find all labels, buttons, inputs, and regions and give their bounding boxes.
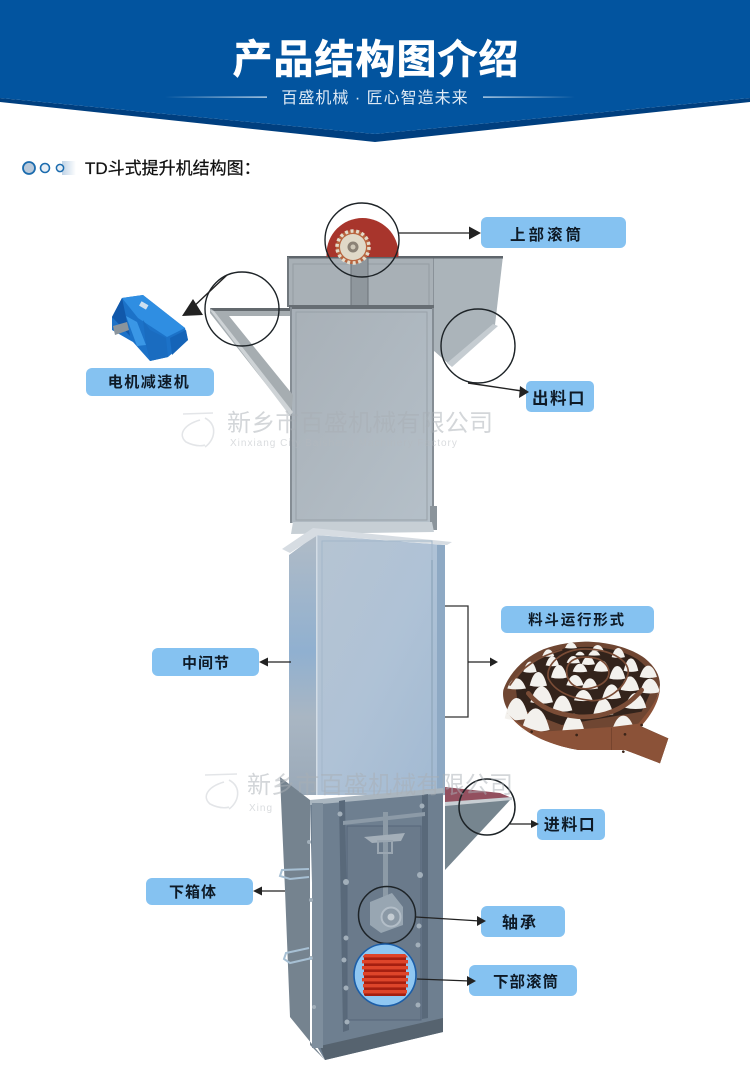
label: motor reducer: 电机减速机	[108, 374, 190, 391]
label: lower box: 下箱体	[169, 883, 217, 901]
label: bearing: 轴承	[502, 914, 538, 932]
watermark text: 新乡市百盛机械有限公司	[227, 410, 493, 437]
bracket arrow: bucket form	[445, 606, 498, 717]
header banner	[0, 0, 750, 142]
label: lower drum	[469, 965, 577, 996]
handles	[280, 869, 309, 879]
head box	[287, 257, 433, 307]
bolts	[307, 804, 424, 1024]
label: lower drum: 下部滚筒	[493, 972, 559, 991]
label: inlet: 进料口	[544, 816, 596, 834]
machine: middle section	[282, 528, 452, 795]
label: discharge	[526, 381, 594, 412]
title: 产品结构图介绍	[232, 38, 520, 82]
photo: bucket belt spiral	[503, 642, 668, 763]
label: motor reducer	[86, 368, 214, 396]
discharge hopper	[433, 256, 503, 365]
gate rod	[383, 812, 388, 907]
watermark logo	[182, 413, 214, 447]
icon: gear reducer	[112, 295, 188, 361]
callout: top drum	[324, 202, 481, 278]
callout: discharge ring	[441, 309, 529, 398]
machine: motor bracket	[210, 308, 293, 416]
icon: three circles	[23, 161, 76, 175]
subtitle: 百盛机械 · 匠心智造未来	[281, 89, 469, 107]
label: bucket form	[501, 606, 654, 633]
callout: inlet ring	[459, 779, 539, 835]
label: bearing	[481, 906, 565, 937]
machine: lower boot	[280, 777, 445, 1060]
callout: motor ring	[182, 272, 279, 346]
watermark logo	[205, 774, 238, 809]
label: upper drum: 上部滚筒	[510, 225, 584, 244]
watermark text: 新乡市百盛机械有限公司	[247, 772, 513, 799]
heading text: TD斗式提升机结构图：	[85, 159, 261, 178]
callout: bearing	[358, 886, 486, 944]
label: middle section	[152, 648, 259, 676]
label: upper drum	[481, 217, 626, 248]
section heading	[23, 159, 261, 178]
arrow: lower box	[253, 886, 285, 896]
machine: inlet hopper	[445, 787, 512, 870]
label: lower box	[146, 878, 253, 905]
watermark lower: Xing	[249, 803, 273, 814]
watermark lower	[205, 772, 513, 814]
main casing	[290, 307, 433, 523]
label: middle section: 中间节	[182, 654, 230, 672]
label: bucket form: 料斗运行形式	[528, 612, 626, 629]
arrow: middle section	[259, 658, 291, 666]
watermark upper	[182, 410, 493, 449]
watermark upper: Xinxiang City Baisheng Machinery Factory	[230, 438, 458, 449]
callout: lower drum	[354, 944, 476, 1006]
label: discharge: 出料口	[532, 389, 586, 408]
machine: upper section	[287, 256, 503, 534]
label: inlet	[537, 809, 605, 840]
